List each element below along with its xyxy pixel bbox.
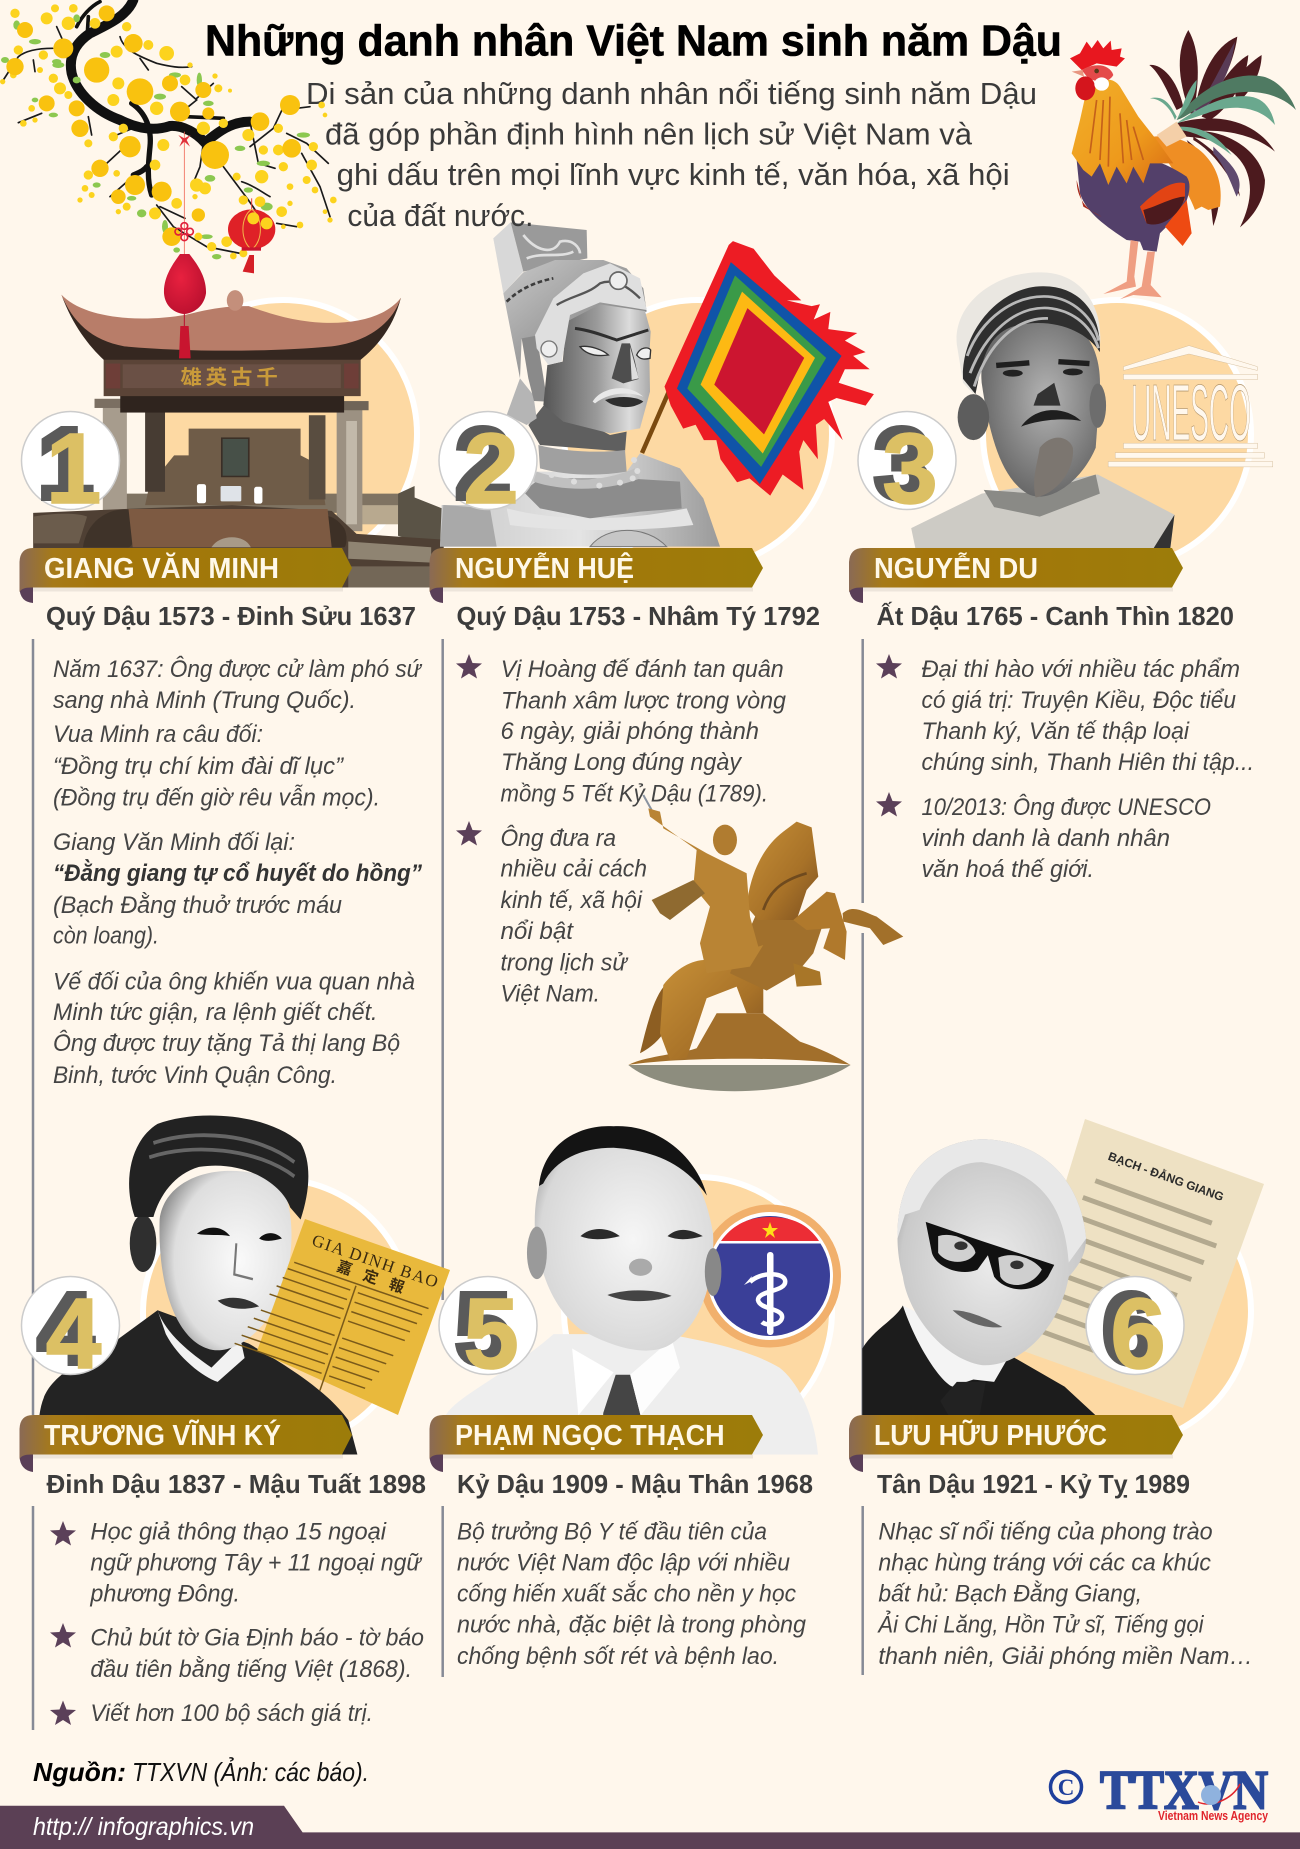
body text 5: Bộ trưởng Bộ Y tế đầu tiên của	[457, 1519, 767, 1546]
image: Gia Định Báo newspaper: 嘉定報	[335, 1257, 407, 1297]
star bullet	[50, 1700, 76, 1725]
ribbon: name 3	[849, 548, 1183, 603]
star bullet	[50, 1521, 76, 1546]
body text 5: nước nhà, đặc biệt là trong phòng	[457, 1612, 806, 1639]
body text 1: Vế đối của ông khiến vua quan nhà	[53, 968, 415, 996]
peach circle 1	[149, 300, 417, 568]
number badge 1	[22, 408, 120, 525]
body text 3: Thanh ký, Văn tế thập loại	[922, 718, 1190, 745]
source note: Nguồn:	[33, 1757, 126, 1787]
body text 2	[456, 654, 786, 1008]
lantern: round red	[228, 198, 275, 273]
number badge 6	[1086, 1273, 1184, 1390]
number badge 3: 3	[882, 413, 938, 525]
title: Những danh nhân Việt Nam sinh năm Dậu	[205, 16, 1062, 66]
image: sheet music: BẠCH - ĐẰNG GIANG	[1106, 1148, 1226, 1204]
body text 4: Chủ bút tờ Gia Định báo - tờ báo	[90, 1625, 424, 1652]
image: portrait Trương Vĩnh Ký	[39, 1115, 357, 1455]
image: portrait Phạm Ngọc Thạch	[444, 1126, 818, 1455]
number badge 5: 5	[463, 1278, 519, 1390]
panel 3: Nguyễn Du	[849, 272, 1273, 883]
panel 2: Nguyễn Huệ	[430, 222, 903, 1091]
image: Gia Định Báo newspaper	[229, 1218, 450, 1415]
body text 1: (Bạch Đằng thuở trước máu	[53, 892, 342, 919]
panel 4: Trương Vĩnh Ký	[20, 1115, 450, 1727]
number badge 2	[439, 408, 537, 525]
body text 1: “Đằng giang tự cổ huyết do hồng”	[53, 859, 423, 887]
image: temple: 雄英古千	[180, 367, 278, 389]
peach circle 5	[564, 1177, 832, 1445]
image: portrait Lưu Hữu Phước	[862, 1139, 1096, 1415]
number badge 1: 1	[46, 413, 101, 525]
number badge 3: 3	[874, 408, 930, 520]
panel 1: Giang Văn Minh	[20, 290, 444, 1089]
body text 3: văn hoá thế giới.	[922, 856, 1094, 883]
intro text	[306, 76, 1037, 233]
peach circle 6	[983, 1177, 1251, 1445]
ribbon: name 3: NGUYỄN DU	[874, 551, 1038, 585]
image: temple	[33, 290, 444, 587]
dates 4: Đinh Dậu 1837 - Mậu Tuất 1898	[46, 1469, 426, 1499]
body text 1: Minh tức giận, ra lệnh giết chết.	[53, 999, 378, 1026]
logo: TTXVN	[1050, 1760, 1268, 1823]
body text 4: phương Đông.	[89, 1581, 240, 1608]
intro text: Di sản của những danh nhân nổi tiếng sinh năm Dậu	[306, 76, 1037, 111]
body text 2: mồng 5 Tết Kỷ Dậu (1789).	[500, 781, 768, 808]
body text 6: thanh niên, Giải phóng miền Nam…	[878, 1643, 1253, 1670]
number badge 1: 1	[38, 408, 93, 520]
ribbon: name 4	[20, 1415, 352, 1472]
body text 5	[457, 1519, 806, 1670]
dates 1: Quý Dậu 1573 - Đinh Sửu 1637	[46, 601, 416, 631]
body text 2: nổi bật	[500, 918, 574, 945]
body text 4: Viết hơn 100 bộ sách giá trị.	[90, 1700, 373, 1727]
peach circle 3	[983, 300, 1251, 568]
body text 1	[53, 655, 423, 1089]
star bullet	[876, 654, 902, 678]
body text 3: vinh danh là danh nhân	[922, 825, 1170, 852]
body text 2: trong lịch sử	[500, 950, 628, 977]
panel 5: Phạm Ngọc Thạch	[430, 1126, 841, 1670]
ribbon: name 2: NGUYỄN HUỆ	[455, 551, 634, 585]
body text 2: Thăng Long đúng ngày	[501, 749, 743, 776]
number badge 5: 5	[455, 1273, 511, 1385]
image: sheet music	[995, 1119, 1264, 1408]
number badge 3	[858, 408, 956, 525]
ribbon: name 2	[430, 548, 763, 603]
vertical column lines	[33, 639, 863, 1730]
image: medical emblem	[699, 1204, 841, 1348]
source note	[33, 1756, 369, 1787]
body text 1: còn loang).	[53, 922, 159, 950]
body text 4: đầu tiên bằng tiếng Việt (1868).	[90, 1656, 412, 1683]
ribbon: name 4: TRƯƠNG VĨNH KÝ	[44, 1418, 281, 1452]
body text 3: có giá trị: Truyện Kiều, Độc tiểu	[922, 687, 1236, 714]
ribbon: name 1: GIANG VĂN MINH	[44, 552, 279, 585]
number badge 2: 2	[455, 408, 511, 520]
footer bar	[0, 1806, 1300, 1849]
image: portrait Nguyễn Du	[911, 272, 1174, 548]
body text 1: Giang Văn Minh đối lại:	[53, 829, 295, 856]
logo: TTXVN: Vietnam News Agency	[1158, 1809, 1268, 1823]
ribbon: name 6: LƯU HỮU PHƯỚC	[874, 1418, 1107, 1452]
body text 6: Nhạc sĩ nổi tiếng của phong trào	[878, 1519, 1213, 1546]
image: flag	[642, 241, 874, 496]
body text 6	[877, 1519, 1253, 1670]
source note: TTXVN (Ảnh: các báo).	[132, 1756, 369, 1787]
image: UNESCO logo	[1108, 346, 1273, 467]
copyright mark: C	[1058, 1775, 1074, 1800]
image: bronze horse statue	[628, 795, 903, 1091]
logo: TTXVN: TTXVN	[1100, 1760, 1268, 1820]
image: Gia Định Báo newspaper: GIA DINH BAO	[310, 1231, 441, 1292]
dates 2: Quý Dậu 1753 - Nhâm Tý 1792	[456, 601, 820, 631]
body text 2: Thanh xâm lược trong vòng	[501, 687, 786, 714]
body text 1: Ông được truy tặng Tả thị lang Bộ	[53, 1029, 400, 1057]
dates 5: Kỷ Dậu 1909 - Mậu Thân 1968	[457, 1469, 813, 1499]
body text 5: nước Việt Nam độc lập với nhiều	[457, 1550, 790, 1577]
intro text: đã góp phần định hình nên lịch sử Việt Nam và	[325, 117, 973, 152]
peach circle 4	[143, 1179, 411, 1447]
image: apricot blossom branch with lanterns	[0, 0, 337, 358]
body text 4: ngữ phương Tây + 11 ngoại ngữ	[90, 1550, 422, 1577]
body text 2: nhiều cải cách	[500, 856, 647, 883]
star bullet	[456, 654, 482, 678]
body text 6: nhạc hùng tráng với các ca khúc	[878, 1550, 1211, 1577]
body text 1: sang nhà Minh (Trung Quốc).	[53, 687, 356, 714]
intro text: của đất nước.	[347, 198, 533, 233]
number badge 6: 6	[1110, 1278, 1166, 1390]
body text 1: Binh, tước Vinh Quận Công.	[53, 1062, 337, 1089]
body text 1: “Đồng trụ chí kim đài dĩ lục”	[53, 753, 345, 780]
body text 3: Đại thi hào với nhiều tác phẩm	[922, 656, 1240, 683]
number badge 2: 2	[463, 413, 519, 525]
ribbon: name 6	[849, 1415, 1183, 1472]
body text 1: Vua Minh ra câu đối:	[53, 721, 263, 748]
star bullet	[50, 1623, 76, 1648]
number badge 5	[439, 1273, 537, 1390]
image: rooster	[1070, 30, 1296, 299]
panel 6: Lưu Hữu Phước	[849, 1119, 1264, 1670]
body text 6: Ải Chi Lăng, Hồn Tử sĩ, Tiếng gọi	[877, 1610, 1204, 1639]
star bullet	[876, 792, 902, 816]
intro text: ghi dấu trên mọi lĩnh vực kinh tế, văn hóa, xã hội	[337, 157, 1010, 192]
ribbon: name 5: PHẠM NGỌC THẠCH	[455, 1420, 725, 1452]
dates 3: Ất Dậu 1765 - Canh Thìn 1820	[876, 601, 1234, 631]
ribbon: name 5	[430, 1415, 763, 1472]
footer bar: http:// infographics.vn	[33, 1813, 254, 1841]
number badge 4: 4	[38, 1273, 94, 1385]
image: silver bust	[440, 222, 720, 547]
dates 6: Tân Dậu 1921 - Kỷ Tỵ 1989	[877, 1469, 1190, 1499]
lantern: tall red	[164, 132, 206, 358]
copyright mark	[1050, 1772, 1082, 1802]
body text 4: Học giả thông thạo 15 ngoại	[90, 1519, 387, 1546]
body text 5: cống hiến xuất sắc cho nền y học	[457, 1581, 796, 1608]
body text 3: 10/2013: Ông được UNESCO	[922, 793, 1211, 821]
body text 4	[50, 1519, 424, 1727]
number badge 4	[22, 1273, 120, 1390]
body text 3: chúng sinh, Thanh Hiên thi tập...	[922, 749, 1254, 776]
ribbon: name 1	[20, 548, 352, 603]
number badge 6: 6	[1102, 1273, 1158, 1385]
body text 2: Vị Hoàng đế đánh tan quân	[501, 656, 784, 683]
body text 2: kinh tế, xã hội	[500, 887, 643, 914]
body text 1: (Đồng trụ đến giờ rêu vẫn mọc).	[53, 784, 380, 812]
body text 2: Việt Nam.	[500, 981, 600, 1008]
peach circle 2	[564, 300, 832, 568]
body text 2: 6 ngày, giải phóng thành	[500, 718, 759, 745]
body text 5: chống bệnh sốt rét và bệnh lao.	[457, 1643, 779, 1670]
number badge 4: 4	[46, 1278, 102, 1390]
star bullet	[456, 821, 482, 846]
body text 6: bất hủ: Bạch Đằng Giang,	[878, 1581, 1142, 1608]
body text 2: Ông đưa ra	[500, 824, 616, 852]
body text 3	[876, 654, 1254, 883]
body text 1: Năm 1637: Ông được cử làm phó sứ	[53, 655, 422, 683]
